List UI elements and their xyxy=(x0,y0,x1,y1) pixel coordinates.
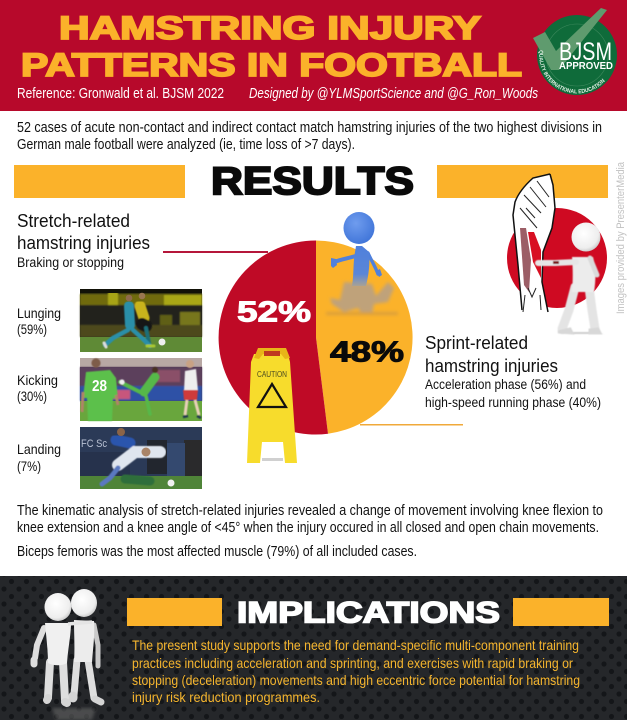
label: kicking xyxy=(17,372,58,404)
label: kicking: (30%) xyxy=(17,388,47,404)
value: 48%: 48% xyxy=(330,336,404,368)
icon: two supporting figures xyxy=(34,589,101,720)
connector: sprint xyxy=(360,424,463,426)
photo: kicking xyxy=(80,358,202,421)
intro text: German male football were analyzed (ie, time loss of >7 days). xyxy=(17,136,355,153)
implications heading xyxy=(127,596,609,630)
heading: sprint-related injuries: Sprint-related xyxy=(425,332,528,353)
heading: stretch-related injuries xyxy=(17,210,150,270)
icon: blue figure stopping xyxy=(326,212,398,315)
body text: kinematic analysis xyxy=(17,503,603,560)
panel: header xyxy=(0,0,627,111)
results heading xyxy=(14,160,608,203)
title xyxy=(21,10,522,83)
implications text xyxy=(132,637,580,705)
badge: BJSM approved xyxy=(533,8,617,95)
pie slice: sprint-related 48% xyxy=(316,240,413,434)
muscle xyxy=(513,174,555,312)
implications heading: IMPLICATIONS xyxy=(237,596,500,630)
badge: BJSM approved: APPROVED xyxy=(559,60,613,72)
heading: stretch-related injuries: hamstring injuries xyxy=(17,232,150,253)
icon: caution sign xyxy=(247,348,297,463)
implications text: injury risk reduction programmes. xyxy=(132,689,320,705)
heading: sprint-related injuries: Acceleration phase (56%) and xyxy=(425,377,586,392)
body text: biceps femoris: Biceps femoris was the most affected muscle (79%) of all included cases. xyxy=(17,544,417,560)
image credit: Images provided by PresenterMedia xyxy=(615,161,627,314)
photo: landing xyxy=(80,427,202,489)
title: HAMSTRING INJURY xyxy=(59,10,481,46)
photo: landing: FC Sc xyxy=(81,438,107,450)
connector: stretch xyxy=(163,251,268,253)
label: lunging: (59%) xyxy=(17,321,47,337)
panel: implications xyxy=(0,576,627,720)
heading: sprint-related injuries: hamstring injuries xyxy=(425,355,558,376)
designer credit: Designed by @YLMSportScience and @G_Ron_Woods xyxy=(249,86,538,102)
label: lunging: Lunging xyxy=(17,305,61,321)
label: landing: Landing xyxy=(17,441,61,457)
photo: kicking: 28 xyxy=(92,378,107,395)
label: landing xyxy=(17,441,61,474)
heading: stretch-related injuries: Stretch-related xyxy=(17,210,130,231)
implications text: practices including acceleration and sprinting, and exercises with rapid braking or xyxy=(132,655,573,671)
icon: hamstring anatomy with pointing figure xyxy=(507,174,607,334)
label: lunging xyxy=(17,305,61,337)
results heading: RESULTS xyxy=(211,160,414,203)
title: PATTERNS IN FOOTBALL xyxy=(21,47,522,83)
pie slice: stretch-related 52% xyxy=(219,240,328,434)
intro text xyxy=(17,119,602,153)
photo: lunging xyxy=(80,289,202,352)
icon: caution sign: CAUTION xyxy=(257,370,287,379)
badge: BJSM approved: BJSM xyxy=(559,38,612,66)
value: 52%: 52% xyxy=(237,296,311,328)
heading: sprint-related injuries: high-speed running phase (40%) xyxy=(425,395,601,410)
label: kicking: Kicking xyxy=(17,372,58,388)
reference line: Reference: Gronwald et al. BJSM 2022 xyxy=(17,86,224,102)
pointing figure xyxy=(538,257,604,334)
badge: BJSM approved: QUALITY INTERNATIONAL EDUCATION xyxy=(538,50,605,94)
heading: sprint-related injuries xyxy=(425,332,601,410)
heading: stretch-related injuries: Braking or stopping xyxy=(17,255,124,270)
label: landing: (7%) xyxy=(17,458,41,474)
pie chart xyxy=(219,240,413,434)
